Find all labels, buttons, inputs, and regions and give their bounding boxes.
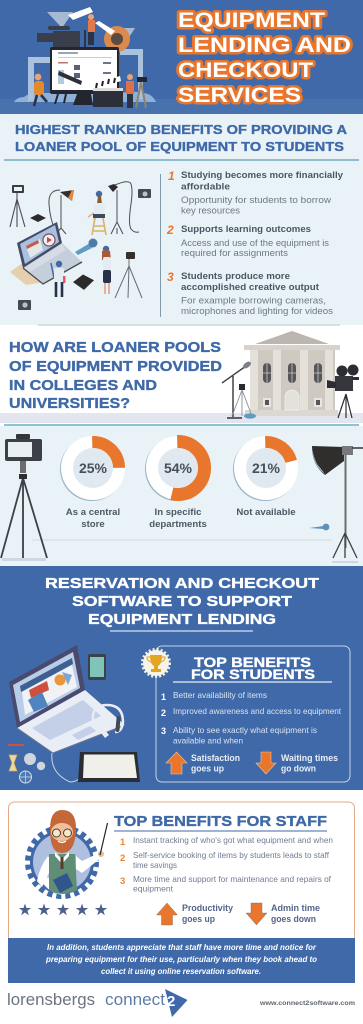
staff benefit list: 1 [120,837,126,848]
callout: admin time goes down: Admin time [271,903,320,913]
panel: closing note: collect it using online reservation software. [101,966,261,976]
callout: admin time goes down: goes down [271,914,316,924]
panel: top benefits for staff [8,802,354,944]
chart: 21% not available [233,436,298,518]
heading [9,340,222,412]
chart: 21% not available: Not available [236,507,296,518]
icon: trophy medal [142,650,170,676]
chart: 25% as a central store: store [81,519,105,530]
benefit 1: Studying becomes more financially [181,170,344,181]
benefit 2: Supports learning outcomes [181,224,311,235]
staff benefit list [120,836,333,894]
benefit 3: microphones and lighting for videos [181,306,333,316]
illustration: students with camera and lighting equipment [10,182,151,310]
staff benefit list: equipment [133,884,174,894]
callout: waiting times go down [281,753,338,774]
heading: HIGHEST RANKED BENEFITS OF PROVIDING A [15,122,348,137]
illustration: camera on tripod [1,434,47,561]
callout: waiting times go down: Waiting times [281,753,338,763]
chart: 54% in specific departments: In specific [155,507,202,518]
logo: connect2 [105,989,188,1017]
heading: OF EQUIPMENT PROVIDED [9,359,222,375]
panel: how loaner pools are provided heading [0,326,363,423]
icon: up arrow [156,903,178,925]
staff benefit list: Instant tracking of who's got what equipment and when [133,836,333,845]
icon: down arrow [246,903,267,925]
benefit 3: 3 [167,270,174,284]
title: CHECKOUT [178,59,313,82]
heading [15,122,348,154]
heading: SOFTWARE TO SUPPORT [72,594,292,610]
title: EQUIPMENT [178,9,325,32]
benefit 1: key resources [181,206,240,216]
heading: FOR STUDENTS [191,666,315,682]
heading: LOANER POOL OF EQUIPMENT TO STUDENTS [15,139,344,154]
title [178,9,351,107]
illustration: laptop, phone, tablet and headphones [8,645,140,783]
benefit 1: 1 [168,169,175,183]
student benefit list: Ability to see exactly what equipment is [173,726,317,735]
callout: satisfaction goes up [191,753,240,774]
panel: closing note: In addition, students appreciate that staff have more time and notice for [47,942,317,952]
panel: highest ranked benefits [0,114,363,326]
panel: top benefits for students [142,646,350,782]
heading: HOW ARE LOANER POOLS [9,340,221,356]
callout: satisfaction goes up: goes up [191,764,224,774]
student benefit list: Improved awareness and access to equipment [173,707,342,716]
website address: www.connect2software.com [259,1000,355,1007]
panel: closing note [8,938,355,983]
chart: 54% in specific departments: departments [149,519,207,530]
benefit 1 [168,169,344,216]
callout: waiting times go down: go down [281,764,316,774]
heading: UNIVERSITIES? [9,396,130,412]
heading: EQUIPMENT LENDING [88,612,276,628]
chart: 21% not available: 21% [252,460,281,476]
staff benefit list: Self-service booking of items by students leads to staff [133,851,330,860]
heading [45,576,319,628]
chart: 25% as a central store [60,436,125,530]
benefit 1: Opportunity for students to borrow [181,195,331,205]
benefit 1: affordable [181,182,230,192]
student benefit list: 2 [161,708,166,718]
panel: reservation and checkout software [0,566,363,790]
heading: IN COLLEGES AND [9,378,157,394]
callout: productivity goes up [182,903,233,924]
heading: RESERVATION AND CHECKOUT [45,576,319,592]
student benefit list: 3 [161,726,166,736]
benefit 2: Access and use of the equipment is [181,238,329,248]
chart: 25% as a central store: As a central [66,507,120,518]
illustration: college building [244,331,340,416]
logo: connect2: connect [105,990,165,1009]
logo: connect2: 2 [167,993,175,1010]
illustration: teacher in badge [28,810,108,896]
icon: down arrow [256,752,276,774]
staff benefit list: 3 [120,876,125,887]
heading: TOP BENEFITS FOR STAFF [114,813,327,830]
benefit 2: required for assignments [181,248,288,258]
logo: lorensbergs: lorensbergs [7,990,95,1009]
title: SERVICES [178,84,301,107]
benefit 2 [166,223,329,258]
student benefit list [161,691,342,746]
chart: 25% as a central store: 25% [79,460,108,476]
illustration: microphone boom and small tripod [222,360,256,419]
student benefit list: Better availability of items [173,691,267,700]
benefit 3: Students produce more [181,271,290,282]
staff benefit list: More time and support for maintenance and repairs of [133,875,332,884]
chart: 54% in specific departments [145,436,210,530]
benefit 3: accomplished creative output [181,282,320,293]
illustration: film camera on tripod [327,364,359,418]
callout: productivity goes up: goes up [182,914,215,924]
heading: TOP BENEFITS [194,654,311,670]
ranked benefit list [166,169,344,316]
title: LENDING AND [178,34,351,57]
illustration: studio light on stand [309,446,363,563]
callout: admin time goes down [271,903,320,924]
staff benefit list: time savings [133,861,177,870]
icon: up arrow [166,752,187,774]
panel: header [0,0,363,114]
heading [191,654,315,682]
callout: satisfaction goes up: Satisfaction [191,753,240,763]
illustration: film production scene around a monitor [14,7,156,108]
star rating [19,904,107,915]
chart: 54% in specific departments: 54% [164,460,193,476]
panel: closing note: preparing equipment for their use, particularly when they book ahead to [45,954,317,964]
benefit 3 [167,270,333,316]
benefit 2: 2 [166,223,174,237]
student benefit list: available and when [173,736,243,746]
student benefit list: 1 [161,692,166,702]
panel: donut charts [0,424,363,566]
staff benefit list: 2 [120,853,125,864]
benefit 3: For example borrowing cameras, [181,296,326,306]
callout: productivity goes up: Productivity [182,903,233,913]
